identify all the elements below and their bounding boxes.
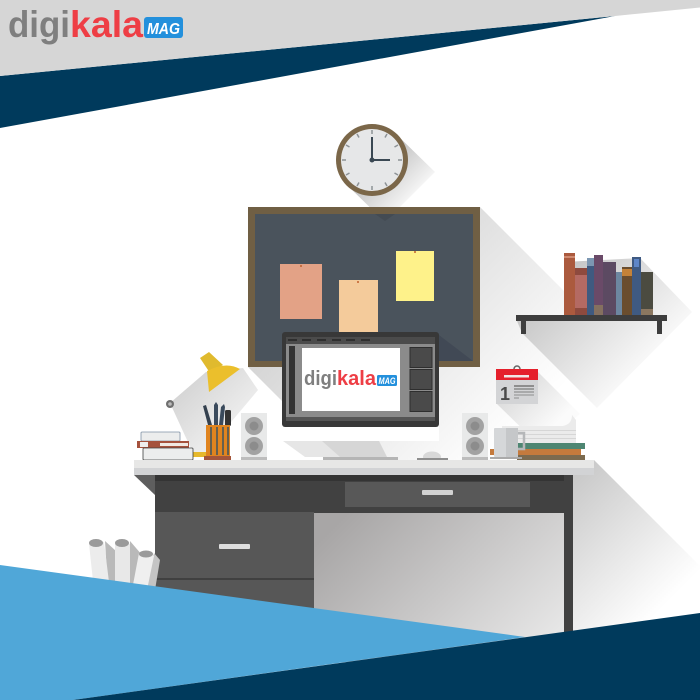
mouse xyxy=(417,452,448,462)
speaker right xyxy=(462,413,488,460)
logo xyxy=(8,4,183,45)
pens xyxy=(203,402,231,426)
monitor logo: kala xyxy=(337,368,377,390)
desk left drawers xyxy=(155,512,314,662)
bottom banner xyxy=(0,565,700,700)
wall shelf xyxy=(516,253,667,334)
top drawer xyxy=(345,482,530,507)
books and papers right xyxy=(490,415,585,460)
monitor screen canvas xyxy=(302,348,400,411)
grey band xyxy=(0,0,700,76)
note: peach xyxy=(339,280,378,332)
monitor side panels xyxy=(410,348,432,412)
pencil cup xyxy=(203,402,231,460)
books on shelf xyxy=(564,253,653,315)
mug xyxy=(490,428,524,459)
books stack left xyxy=(137,432,193,460)
desk xyxy=(134,460,594,665)
desk frieze xyxy=(155,475,573,513)
calendar xyxy=(496,366,538,404)
desk lamp xyxy=(166,352,240,457)
shadow: calendar xyxy=(497,372,580,446)
note: yellow xyxy=(396,251,434,301)
shelf board xyxy=(516,315,667,334)
logo MAG badge: MAG xyxy=(147,21,180,38)
desk right leg xyxy=(564,475,573,665)
shadow: clock xyxy=(347,135,435,222)
navy corner band xyxy=(73,613,700,700)
clock hands xyxy=(370,137,390,162)
shadow: shelf and books xyxy=(517,258,692,408)
monitor stand xyxy=(282,427,439,460)
under-desk opening xyxy=(314,512,564,662)
logo wordmark kala: kala xyxy=(70,4,143,45)
shadow: lamp xyxy=(170,368,258,453)
shadow: board xyxy=(248,207,610,460)
monitor xyxy=(282,332,439,460)
monitor logo: digi xyxy=(304,368,337,390)
desk underside wedge xyxy=(134,475,155,495)
logo wordmark digi: digi xyxy=(8,4,70,45)
calendar grid xyxy=(514,385,534,399)
blue band xyxy=(0,565,525,700)
drawer handle left xyxy=(219,544,250,549)
desktop surface xyxy=(134,460,594,475)
note: salmon xyxy=(280,264,322,319)
clock xyxy=(336,124,408,196)
monitor logo xyxy=(304,368,397,390)
calendar date: 1 xyxy=(500,384,510,404)
speaker left xyxy=(241,413,267,460)
paper rolls xyxy=(89,539,160,590)
shadow: desk right xyxy=(573,460,700,640)
pin board xyxy=(248,207,480,367)
navy band xyxy=(0,16,615,128)
top banner xyxy=(0,0,700,128)
drawer handle top xyxy=(422,490,453,495)
monitor logo: MAG xyxy=(378,376,396,386)
